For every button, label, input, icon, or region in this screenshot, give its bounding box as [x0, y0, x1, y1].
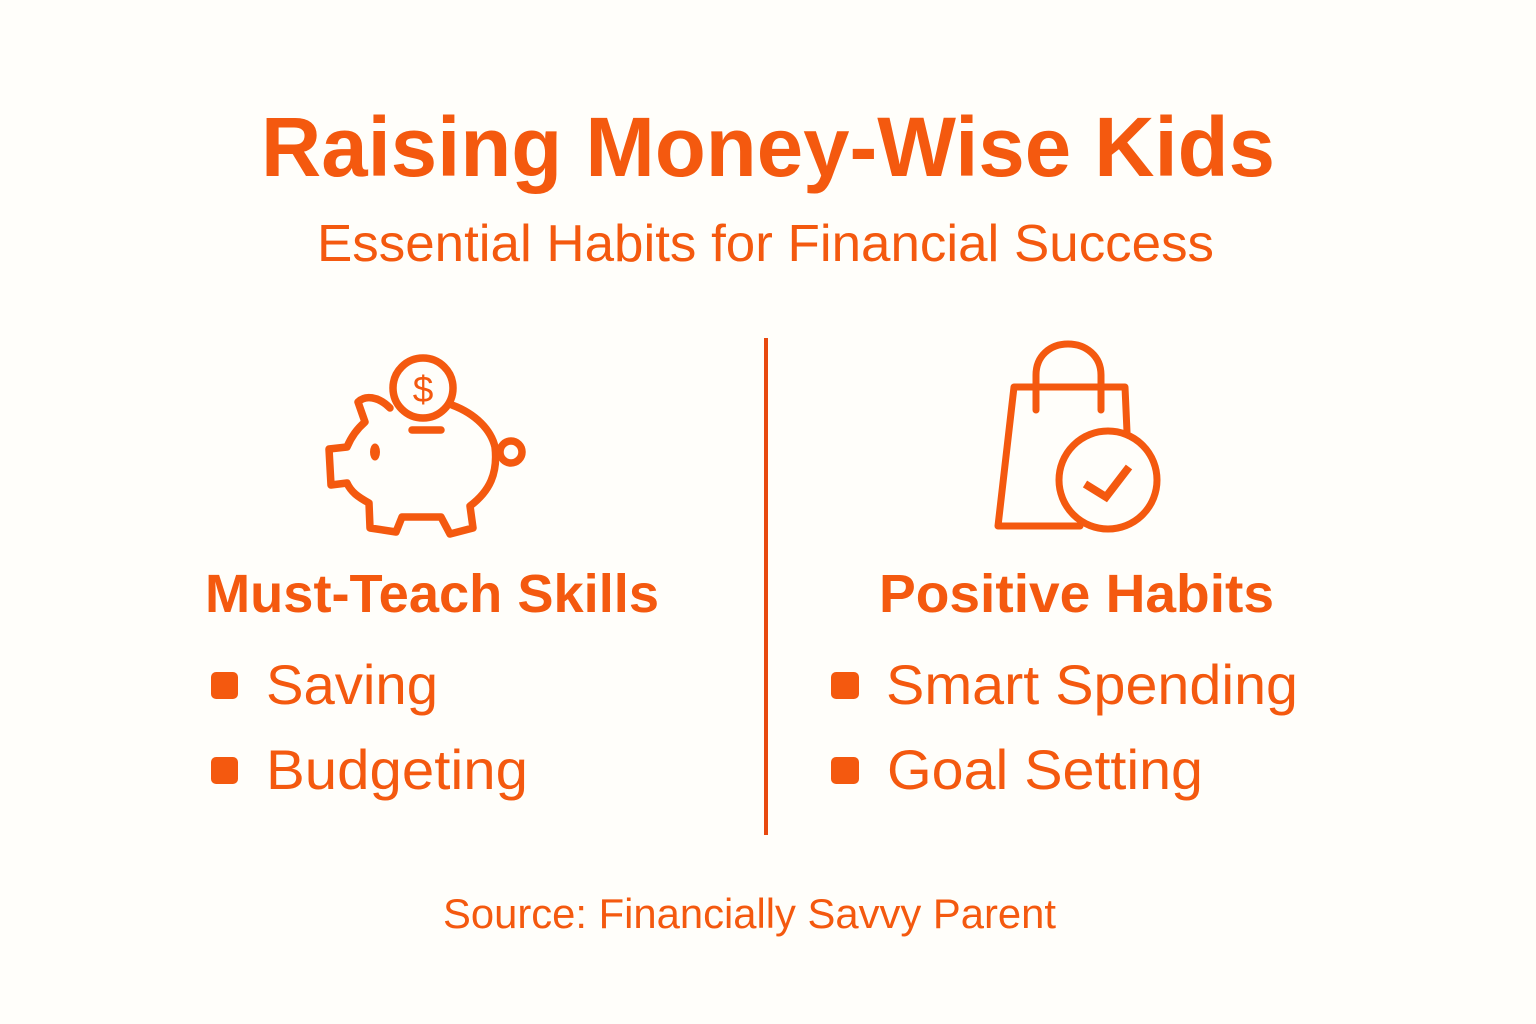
source: Source: Financially Savvy Parent: [443, 890, 1056, 937]
list item: smart spending: Smart Spending: [886, 653, 1298, 716]
list item: goal setting: Goal Setting: [887, 738, 1203, 801]
panel: positive habits: [831, 344, 1298, 801]
icon: piggy bank with coin: [329, 358, 522, 534]
bullet: goal setting: [831, 757, 859, 784]
icon: dollar sign: $: [413, 369, 433, 410]
title: Raising Money-Wise Kids: [261, 100, 1275, 194]
center divider: [764, 338, 768, 835]
heading: must-teach skills: Must-Teach Skills: [205, 564, 659, 624]
list item: budgeting: Budgeting: [266, 738, 528, 801]
heading: positive habits: Positive Habits: [879, 564, 1274, 624]
bullet: smart spending: [831, 672, 859, 699]
bullet: saving: [211, 672, 238, 699]
list item: saving: Saving: [266, 653, 438, 716]
icon: piggy eye: [372, 445, 378, 459]
bullet: budgeting: [211, 757, 238, 784]
subtitle: Essential Habits for Financial Success: [317, 215, 1214, 273]
panel: must-teach skills: [205, 358, 659, 801]
icon: shopping bag with check: [998, 344, 1157, 529]
